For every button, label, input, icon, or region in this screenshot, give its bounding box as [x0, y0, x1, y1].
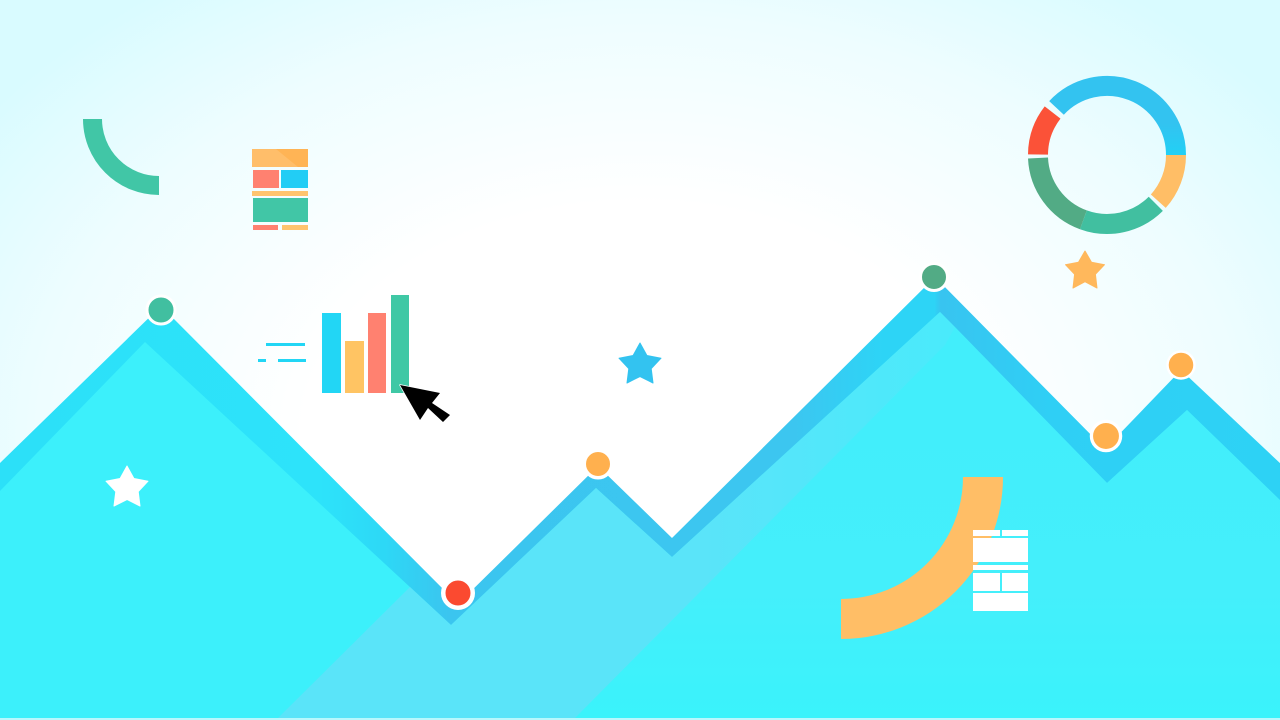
lighter overlay ridge: [278, 312, 955, 718]
icon: bar chart with speed lines: [258, 295, 409, 393]
icon: orange large arc: [841, 477, 983, 619]
data point: orange middle peak: [584, 450, 612, 478]
icon: teal arc: [92, 119, 159, 186]
icon: colored layout grid: [252, 149, 308, 230]
data point: green left peak: [147, 296, 175, 324]
data point: green high peak: [920, 264, 948, 290]
mountain edge band: [0, 277, 1280, 718]
icon: orange star: [1066, 251, 1104, 288]
icon: white layout grid: [973, 530, 1028, 611]
data point: red valley: [443, 578, 473, 608]
icon: white star: [106, 466, 148, 506]
icon: blue star: [619, 343, 661, 383]
mountain front right tone: [575, 327, 1280, 718]
mountain front: [0, 312, 1280, 718]
bottom edge strip: [0, 718, 1280, 720]
icon: donut chart: [1038, 86, 1176, 224]
data point: orange right valley: [1091, 421, 1121, 451]
data point: orange right peak: [1168, 352, 1194, 378]
icon: cursor arrow: [400, 385, 450, 422]
